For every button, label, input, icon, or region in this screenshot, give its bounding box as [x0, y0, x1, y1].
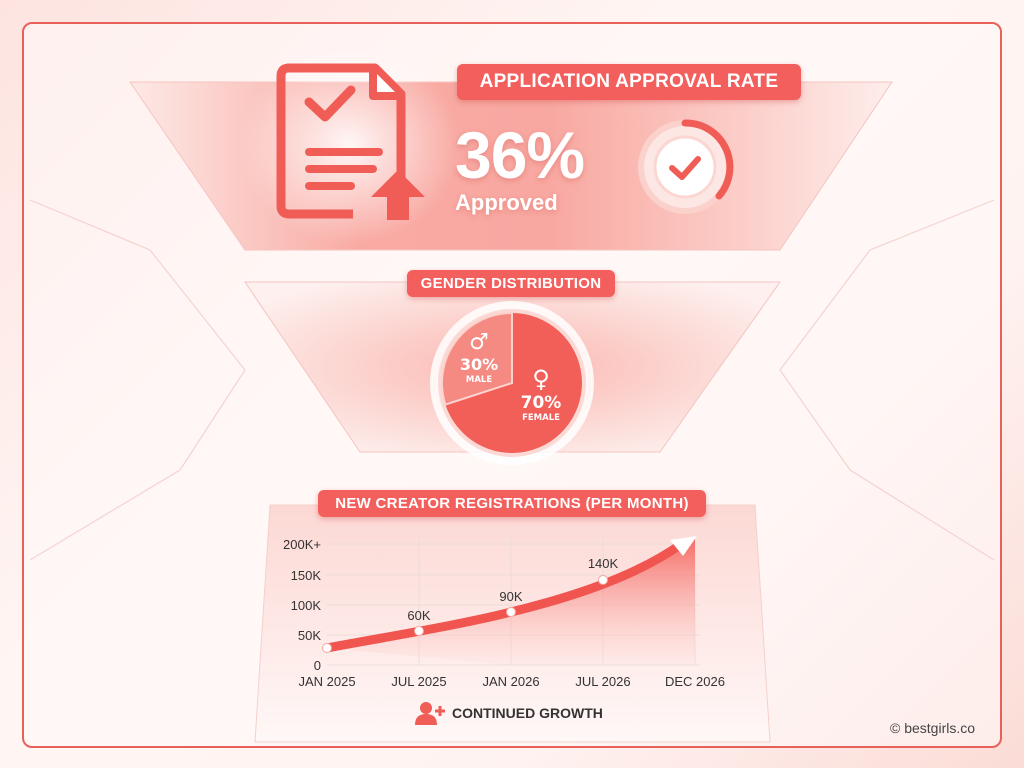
heading: gender distribution: [407, 270, 615, 297]
pie chart: gender: FEMALE: [522, 413, 560, 423]
line chart: registrations: 140K: [588, 556, 619, 571]
pie chart: gender: 70%: [521, 393, 561, 413]
line chart: registrations: DEC 2026: [665, 674, 725, 689]
line chart: registrations: 0: [314, 658, 321, 673]
line chart: registrations: JUL 2026: [575, 674, 631, 689]
line chart: registrations: 100K: [291, 598, 321, 613]
line chart: registrations: 150K: [291, 568, 321, 583]
pie chart: gender: [430, 301, 594, 457]
line chart: registrations: JAN 2026: [482, 674, 540, 689]
pie chart: gender: 30%: [460, 355, 498, 374]
line chart: registrations: JAN 2025: [298, 674, 356, 689]
callout: continued growth: [415, 702, 603, 725]
line chart: registrations: JUL 2025: [391, 674, 447, 689]
line chart: registrations: 60K: [407, 608, 431, 623]
icon: add user: [415, 702, 445, 725]
credit: © bestgirls.co: [890, 720, 975, 736]
heading: new creator registrations: [318, 490, 706, 517]
callout: continued growth: CONTINUED GROWTH: [452, 705, 603, 721]
icon: check ring gauge: [638, 120, 734, 214]
heading: new creator registrations: NEW CREATOR REGISTRATIONS (PER MONTH): [335, 495, 689, 512]
pie chart: gender: ♂: [469, 330, 489, 355]
line chart: registrations: 90K: [499, 589, 523, 604]
pie chart: gender: ♀: [532, 365, 550, 393]
heading: gender distribution: GENDER DISTRIBUTION: [421, 275, 601, 292]
line chart: registrations: 50K: [298, 628, 321, 643]
line chart: registrations: 200K+: [283, 537, 321, 552]
heading: application approval rate: APPLICATION APPROVAL RATE: [480, 71, 778, 92]
pie chart: gender: MALE: [466, 375, 492, 385]
heading: application approval rate: [457, 64, 801, 100]
stat: 36% approved: 36%: [455, 118, 584, 192]
icon: document with check and arrow: [276, 64, 425, 220]
stat: 36% approved: Approved: [455, 190, 558, 215]
